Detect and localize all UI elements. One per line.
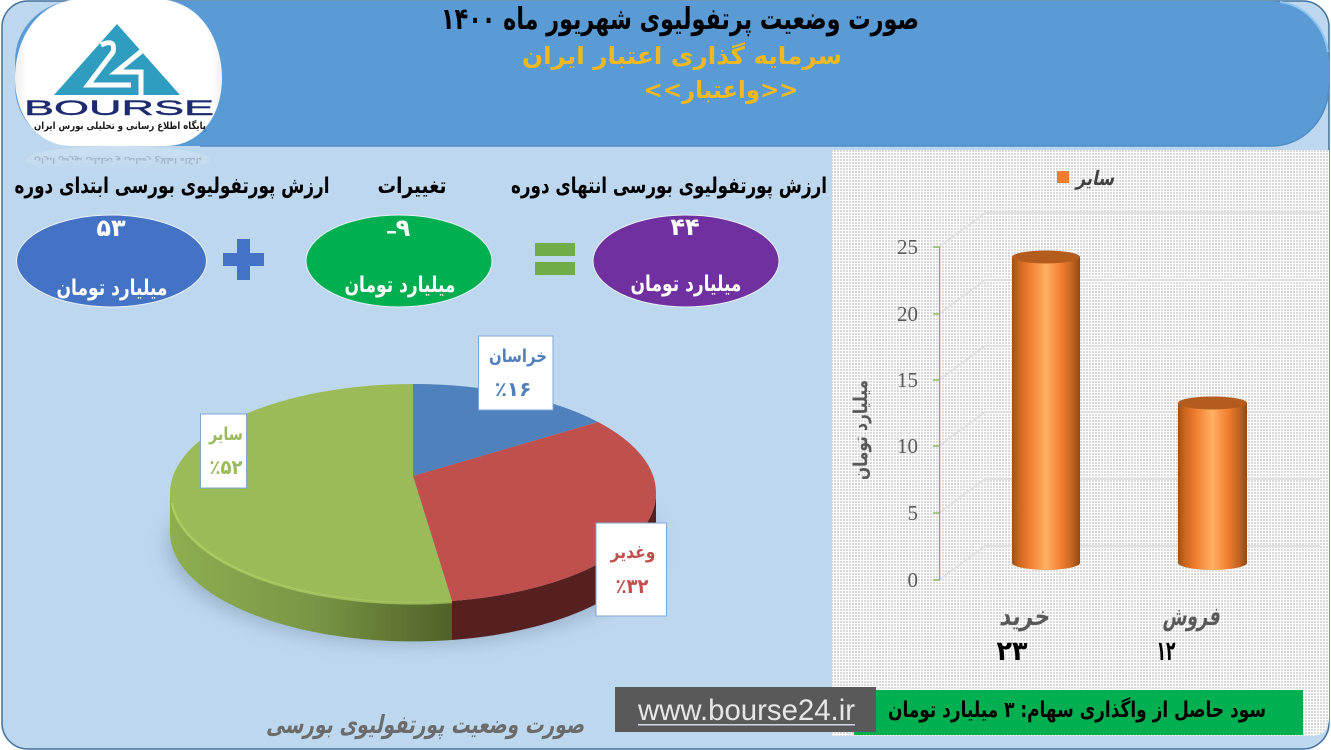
ellipse: start value 53: ۵۳ <box>96 214 126 242</box>
chart gridlines <box>939 213 1320 580</box>
title: صورت وضعیت پرتفولیوی شهریور ماه ۱۴۰۰ <box>441 2 919 37</box>
y axis <box>933 247 940 580</box>
subtitle: company name: سرمایه گذاری اعتبار ایران <box>522 42 842 70</box>
subtitle: ticker: <<واعتبار>> <box>644 76 798 104</box>
website badge: www.bourse24.ir <box>637 694 855 727</box>
pie label: Khorasan 16% <box>478 336 553 410</box>
pie chart: portfolio composition <box>167 384 659 645</box>
ellipse: end value 44 <box>593 213 779 307</box>
bar chart: buy and sell <box>850 213 1320 667</box>
bar: buy <box>1012 250 1080 570</box>
pie label: Ghadir 32%: ٪۳۲ <box>616 574 648 598</box>
heading: changes: تغییرات <box>378 174 446 199</box>
legend: other <box>1057 166 1118 190</box>
pie label: Khorasan 16%: ٪۱۶ <box>495 377 531 401</box>
ellipse: change -9: ۹ <box>396 214 411 242</box>
pie label: other 52% <box>200 414 246 488</box>
y axis tick labels: 15 <box>897 368 918 392</box>
value: sell 12: ۱۲ <box>1156 636 1176 667</box>
pie side: Ghadir <box>452 493 656 640</box>
ellipse: change -9 <box>306 214 492 307</box>
y axis tick labels <box>897 235 918 592</box>
bar: sell <box>1178 396 1247 570</box>
panel: bar chart background <box>832 150 1329 736</box>
y axis title: میلیارد تومان <box>850 380 872 480</box>
callout: share sale profit <box>854 690 1303 735</box>
legend: other: سایر <box>1074 166 1118 190</box>
logo reflection <box>26 146 210 174</box>
panel: header band <box>15 1 1329 146</box>
ellipse: end value 44: میلیارد تومان <box>630 272 742 297</box>
category label: buy: خرید <box>998 602 1053 632</box>
pie label: Khorasan 16%: خراسان <box>489 346 547 367</box>
pie slice: Ghadir <box>413 422 656 601</box>
logo tagline: پایگاه اطلاع رسانی و تحلیلی بورس ایران <box>34 119 206 132</box>
icon: plus sign <box>223 239 264 280</box>
icon: teal triangle with 24 <box>54 24 180 98</box>
ellipse: start value 53: میلیارد تومان <box>56 276 168 301</box>
website badge <box>615 687 876 732</box>
heading: start of period value: ارزش پورتفولیوی بورسی ابتدای دوره <box>14 174 330 199</box>
ellipse: change -9: میلیارد تومان <box>344 273 456 298</box>
logo reflection: پایگاه اطلاع رسانی و تحلیلی بورس ایران <box>34 155 202 166</box>
icon: equals sign <box>535 243 575 275</box>
ellipse: end value 44: ۴۴ <box>670 213 700 241</box>
wordmark: BOURSE <box>24 97 214 120</box>
y axis tick labels: 10 <box>897 434 918 458</box>
value: buy 23: ۲۳ <box>996 636 1028 667</box>
y axis tick labels: 25 <box>897 235 918 259</box>
pie label: Ghadir 32%: وغدیر <box>610 542 656 563</box>
logo: Bourse24 <box>15 0 222 146</box>
pie label: other 52%: ٪۵۲ <box>210 455 242 479</box>
y axis tick labels: 0 <box>908 568 918 592</box>
pie slice: other <box>170 384 452 602</box>
category label: sell: فروش <box>1161 602 1224 632</box>
heading: end of period value: ارزش پورتفولیوی بورسی انتهای دوره <box>511 174 827 199</box>
footer caption: صورت وضعیت پورتفولیوی بورسی <box>265 710 589 740</box>
y axis tick labels: 5 <box>908 501 918 525</box>
callout: share sale profit: سود حاصل از واگذاری سهام: ۳ میلیارد تومان <box>888 696 1266 723</box>
ellipse: start value 53 <box>16 214 206 307</box>
y axis tick labels: 20 <box>897 302 918 326</box>
pie slice: Khorasan <box>413 384 598 476</box>
pie label: other 52%: سایر <box>208 424 243 445</box>
pie label: Ghadir 32% <box>596 523 666 616</box>
pie side: other <box>170 493 452 641</box>
